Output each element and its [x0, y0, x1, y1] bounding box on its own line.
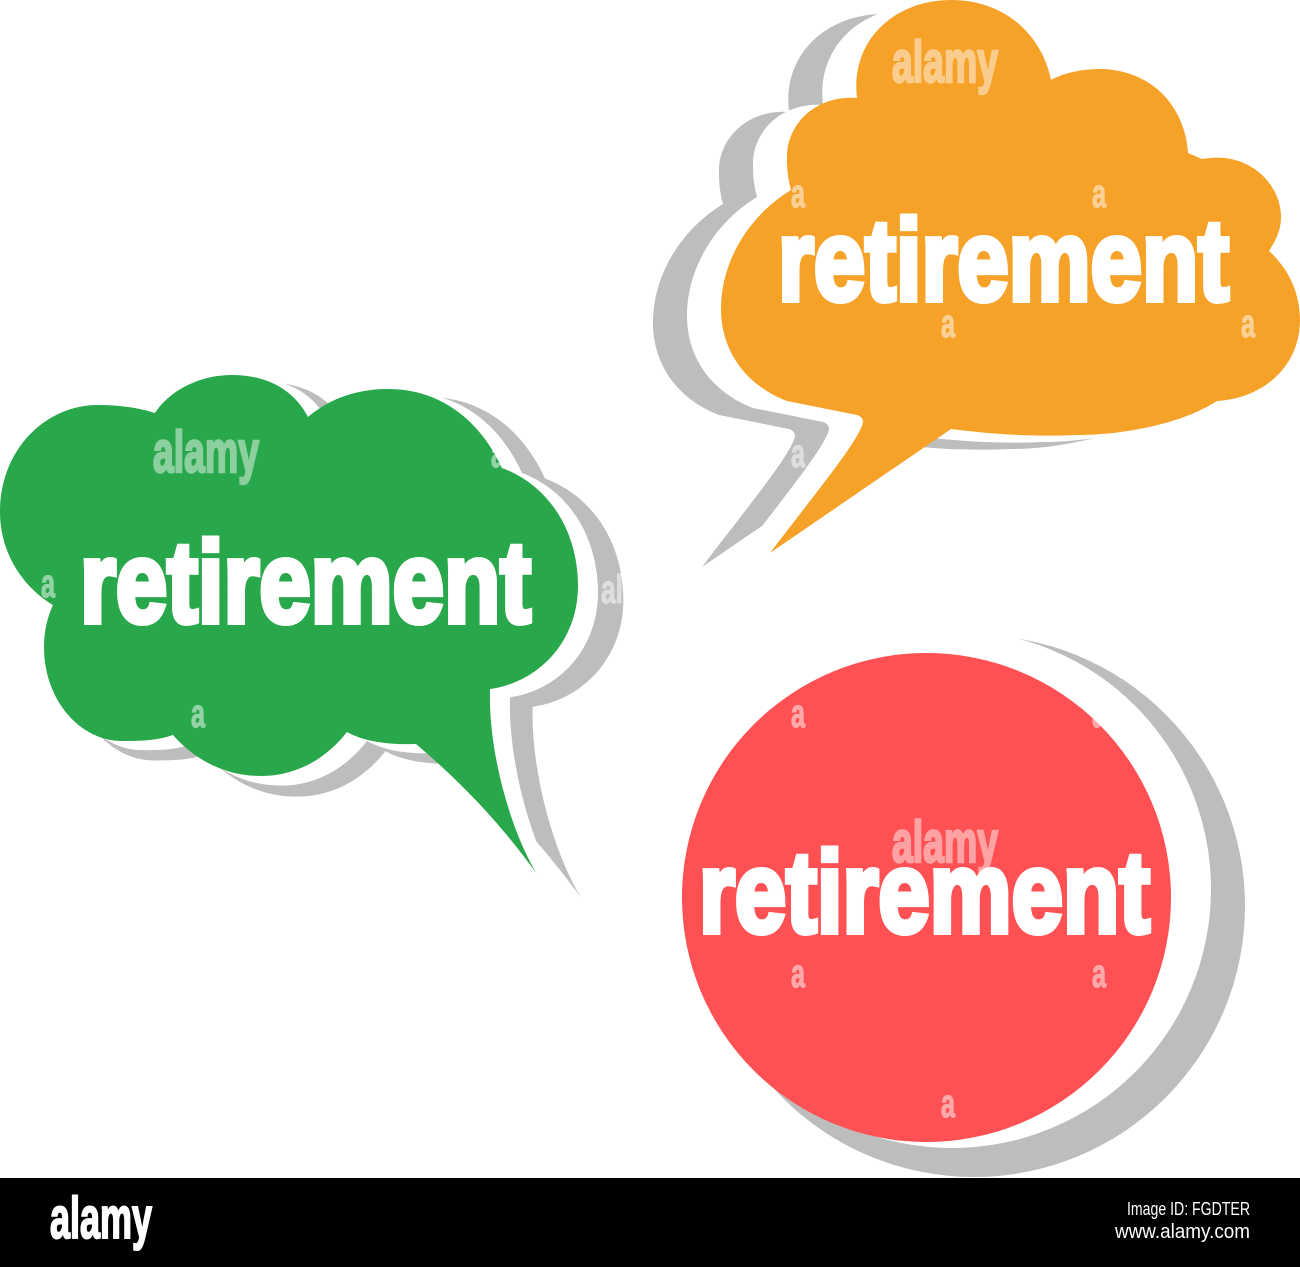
watermark: green bubble: alamy	[153, 420, 259, 485]
watermark: red circle: a	[791, 692, 805, 736]
panel: orange speech bubble sticker	[653, 0, 1300, 567]
watermark: red circle: a	[941, 1082, 955, 1126]
footer band	[0, 1178, 1300, 1267]
sticker white edge: red circle	[693, 630, 1211, 1148]
watermark: orange bubble: a	[941, 302, 955, 346]
heading: retirement (green): retirement	[80, 519, 531, 647]
watermark: orange bubble: a	[791, 172, 805, 216]
watermark: green bubble: a	[41, 562, 55, 606]
sticker white edge: green bubble	[20, 379, 598, 885]
watermark: red circle: a	[1092, 952, 1106, 996]
watermark: orange bubble: a	[791, 432, 805, 476]
watermark: orange bubble: a	[1241, 302, 1255, 346]
watermark: green bubble: a	[191, 692, 205, 736]
green cloud shape	[0, 375, 578, 874]
watermark: red circle: a	[791, 952, 805, 996]
sticker shadow: orange bubble	[653, 14, 1232, 567]
heading: retirement (red): retirement	[699, 829, 1150, 957]
sticker shadow: green bubble	[28, 382, 623, 898]
watermark: orange bubble: alamy	[892, 30, 998, 95]
orange cloud shape	[721, 0, 1300, 553]
watermark: orange bubble: a	[1092, 172, 1106, 216]
panel: green speech bubble sticker	[0, 375, 623, 898]
watermark on green shadow: al	[601, 568, 623, 612]
watermark: red circle: a	[1092, 692, 1106, 736]
watermark: orange bubble	[791, 30, 1255, 476]
red circle shape	[682, 653, 1171, 1142]
panel: red circle sticker	[682, 630, 1245, 1177]
sticker white edge: orange bubble	[687, 7, 1266, 560]
watermark: green bubble	[41, 420, 505, 736]
footer logo: alamy	[50, 1186, 152, 1251]
watermark: green bubble: a	[491, 432, 505, 476]
watermark: red circle	[791, 692, 1106, 1126]
sticker shadow: red circle	[703, 635, 1245, 1177]
image id: Image ID: FGDTER	[1127, 1199, 1250, 1219]
website: www.alamy.com	[1114, 1221, 1250, 1243]
watermark: red circle: alamy	[892, 810, 998, 875]
